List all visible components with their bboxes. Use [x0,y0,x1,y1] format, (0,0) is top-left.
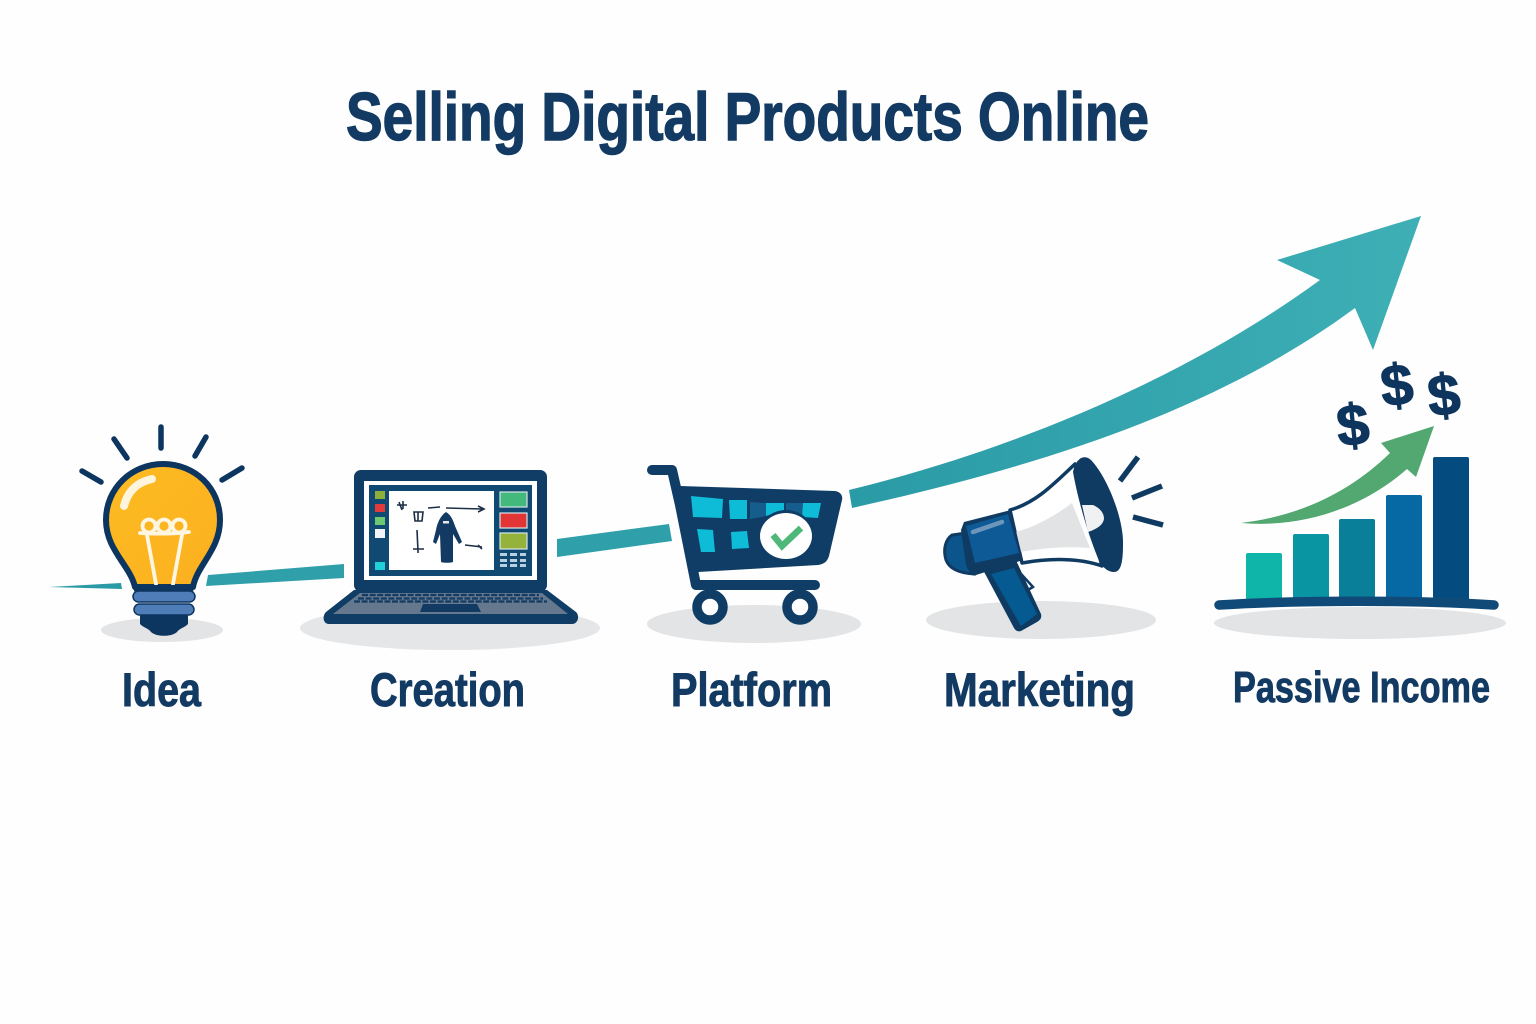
dollar signs: $ [1333,391,1372,460]
screen colour panels [500,492,527,567]
cart windows [691,496,821,552]
dollar signs: $ [1377,351,1416,420]
step 2: creation laptop icon [300,470,600,650]
chart baseline [1219,601,1494,605]
growth arrow running through the steps [49,216,1421,589]
step 3: platform shopping cart icon [647,470,861,643]
step 4: marketing megaphone icon [926,457,1163,639]
label: marketing: Marketing [944,663,1135,716]
bell rim [1073,457,1123,572]
laptop base and keyboard [324,590,578,624]
laptop lid [354,470,547,592]
step 1: idea light bulb icon [82,427,242,642]
screen tool palette [375,491,385,570]
handle and trigger [1013,565,1033,590]
screen design sketch [397,501,484,563]
bars [1246,457,1469,603]
label: creation: Creation [370,663,525,716]
back cap [945,533,974,574]
body grip [961,510,1023,575]
label: platform: Platform [671,663,832,716]
label: idea: Idea [122,663,202,716]
title: Selling Digital Products Online [346,79,1149,155]
step 5: passive income chart icon [1214,351,1506,639]
dollar signs [1333,351,1463,460]
horn [1010,464,1102,566]
green trend arrow [1241,426,1434,524]
check badge [758,510,814,562]
dollar signs: $ [1424,361,1463,430]
